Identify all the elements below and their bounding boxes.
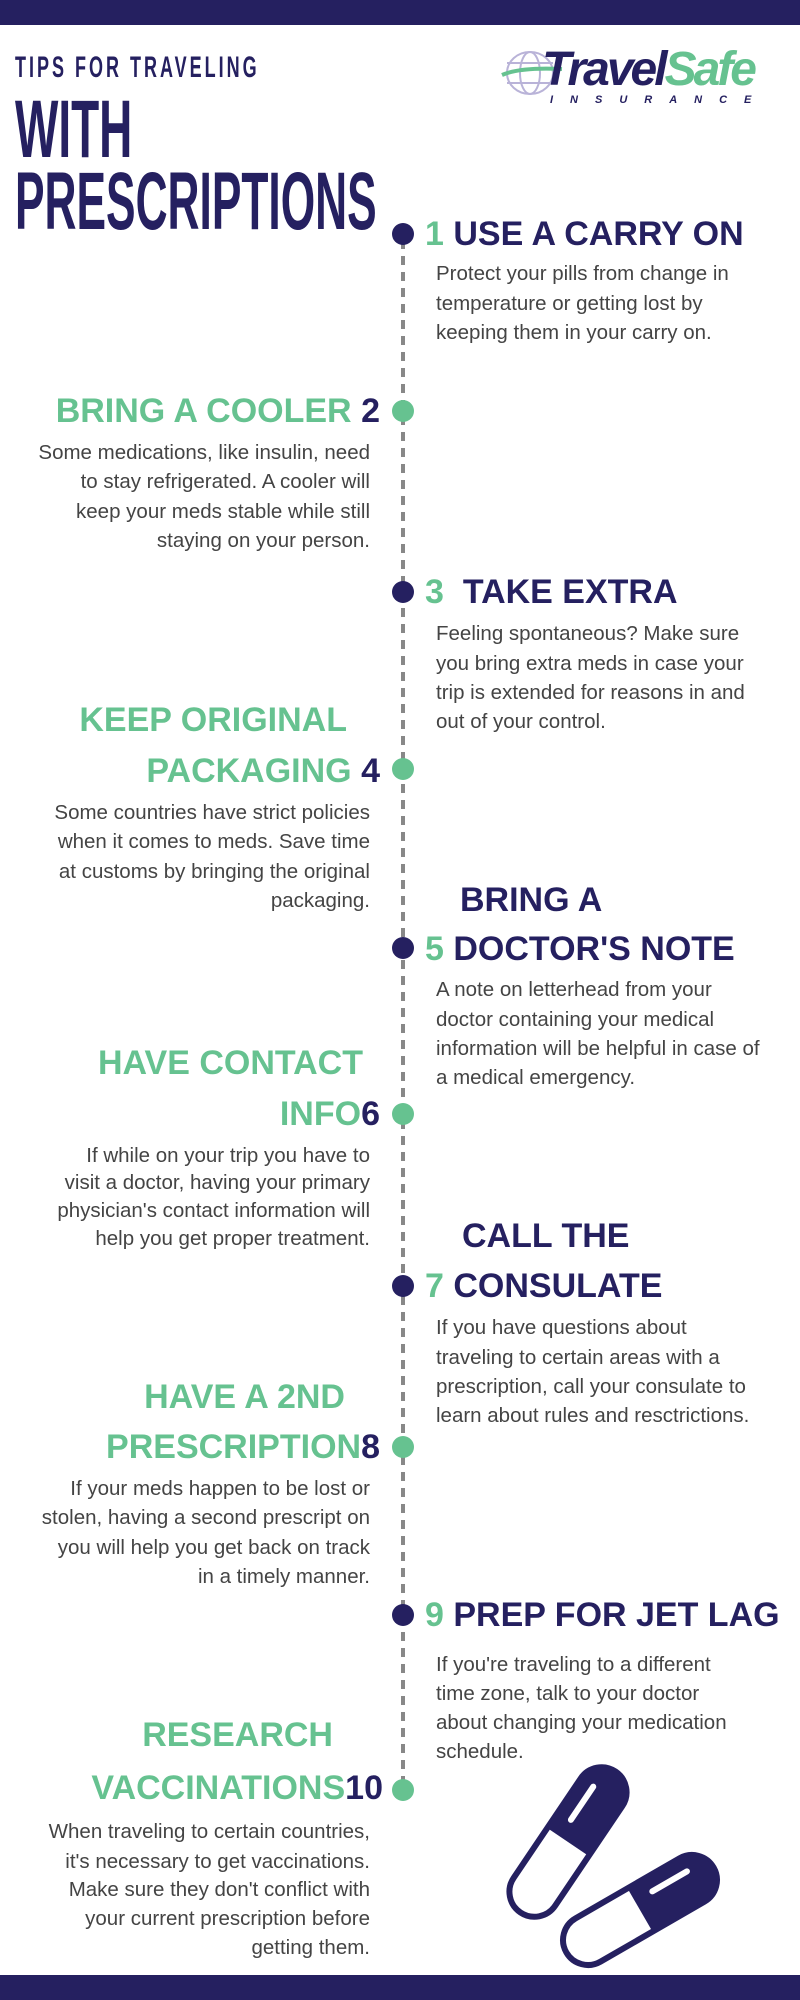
item 3: Feeling spontaneous? Make sure	[436, 622, 739, 645]
item 2: to stay refrigerated. A cooler will	[81, 470, 370, 493]
item 1	[392, 215, 744, 344]
item 1: temperature or getting lost by	[436, 292, 703, 315]
item 4: Some countries have strict policies	[54, 801, 370, 824]
item 10: your current prescription before	[85, 1907, 370, 1930]
item 5: doctor containing your medical	[436, 1008, 714, 1031]
item 1: 1 USE A CARRY ON	[425, 215, 744, 253]
item 4: packaging.	[271, 889, 370, 912]
item 9	[392, 1596, 780, 1763]
item 10: When traveling to certain countries,	[49, 1820, 370, 1843]
item 8	[42, 1378, 414, 1588]
item 9: time zone, talk to your doctor	[436, 1682, 699, 1705]
item 2: Some medications, like insulin, need	[38, 441, 370, 464]
item 5: information will be helpful in case of	[436, 1037, 760, 1060]
item 9: 9 PREP FOR JET LAG	[425, 1596, 780, 1634]
item 2: staying on your person.	[157, 529, 370, 552]
item 5: A note on letterhead from your	[436, 978, 712, 1001]
item 5	[392, 881, 760, 1089]
bottom bar	[0, 1975, 800, 2000]
item 3: trip is extended for reasons in and	[436, 681, 745, 704]
item 6: If while on your trip you have to	[86, 1144, 370, 1167]
item 5: BRING A	[460, 881, 602, 919]
item 9: schedule.	[436, 1740, 524, 1763]
top bar	[0, 0, 800, 25]
item 8: If your meds happen to be lost or	[70, 1477, 370, 1500]
item 6: visit a doctor, having your primary	[65, 1171, 370, 1194]
item 6: HAVE CONTACT	[98, 1044, 363, 1082]
item 10: RESEARCH	[142, 1716, 333, 1754]
title: TIPS FOR TRAVELING	[15, 51, 260, 84]
logo: INSURANCE	[550, 94, 768, 106]
item 2: keep your meds stable while still	[76, 500, 370, 523]
item 8: stolen, having a second prescript on	[42, 1506, 370, 1529]
item 6: INFO6	[280, 1095, 380, 1133]
item 8: HAVE A 2ND	[144, 1378, 345, 1416]
icon: pills	[506, 1764, 720, 1968]
item 7: prescription, call your consulate to	[436, 1375, 746, 1398]
item 4: at customs by bringing the original	[59, 860, 370, 883]
icon: globe swoosh	[501, 51, 562, 95]
item 7: learn about rules and resctrictions.	[436, 1404, 749, 1427]
item 2: BRING A COOLER 2	[56, 392, 380, 430]
item 8: PRESCRIPTION8	[106, 1428, 380, 1466]
item 10: Make sure they don't conflict with	[69, 1878, 370, 1901]
item 3: you bring extra meds in case your	[436, 652, 744, 675]
logo: TravelSafe	[542, 43, 754, 96]
item 7: 7 CONSULATE	[425, 1267, 662, 1305]
item 7: If you have questions about	[436, 1316, 687, 1339]
item 10	[48, 1716, 414, 1959]
title: PRESCRIPTIONS	[15, 156, 377, 247]
item 7: traveling to certain areas with a	[436, 1346, 720, 1369]
item 3: 3 TAKE EXTRA	[425, 573, 678, 611]
item 7	[392, 1217, 749, 1427]
item 2	[38, 392, 414, 552]
item 1: Protect your pills from change in	[436, 262, 729, 285]
item 3: out of your control.	[436, 710, 606, 733]
item 6: physician's contact information will	[57, 1199, 370, 1222]
item 6: help you get proper treatment.	[95, 1227, 370, 1250]
item 7: CALL THE	[462, 1217, 629, 1255]
item 4: when it comes to meds. Save time	[58, 830, 370, 853]
item 4	[54, 701, 414, 912]
item 5: 5 DOCTOR'S NOTE	[425, 930, 735, 968]
item 10: VACCINATIONS10	[91, 1769, 383, 1807]
item 5: a medical emergency.	[436, 1066, 635, 1089]
logo	[501, 43, 768, 106]
item 9: If you're traveling to a different	[436, 1653, 711, 1676]
item 6	[57, 1044, 414, 1250]
item 10: it's necessary to get vaccinations.	[65, 1850, 370, 1873]
item 1: keeping them in your carry on.	[436, 321, 712, 344]
item 8: in a timely manner.	[198, 1565, 370, 1588]
item 8: you will help you get back on track	[58, 1536, 370, 1559]
item 3	[392, 573, 745, 733]
item 4: KEEP ORIGINAL	[79, 701, 347, 739]
title: WITH	[15, 84, 132, 175]
timeline dashed line	[401, 240, 405, 1785]
item 10: getting them.	[251, 1936, 370, 1959]
title	[15, 51, 377, 247]
item 9: about changing your medication	[436, 1711, 727, 1734]
item 4: PACKAGING 4	[146, 752, 380, 790]
